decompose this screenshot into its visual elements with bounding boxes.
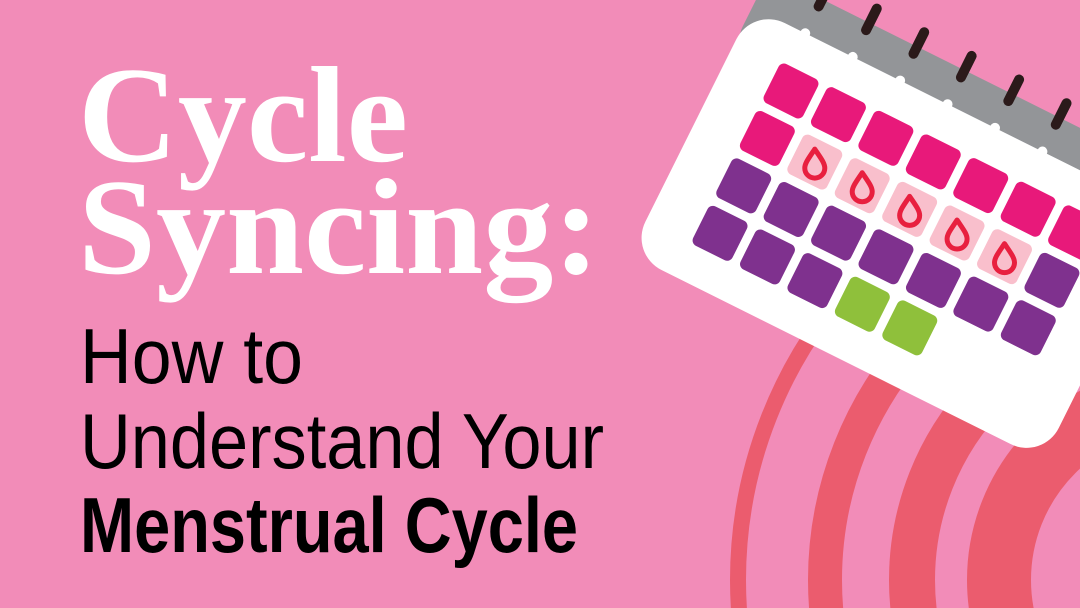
title: Cycle Syncing: Cycle [78,39,408,191]
calendar rings [819,0,1080,148]
subtitle: Understand Your [80,397,604,485]
subtitle: How to [80,312,303,400]
calendar header band [729,0,1080,260]
green tiles [833,275,939,357]
subtitle [80,312,604,569]
calendar body [629,7,1080,460]
title: Cycle Syncing [78,39,600,303]
subtitle: Menstrual Cycle [80,481,578,569]
pink tiles [738,61,1080,310]
period drop tiles [785,133,1034,286]
purple tiles [691,109,1080,405]
calendar [629,0,1080,460]
title: Cycle Syncing: Syncing: [78,151,600,303]
concentric rings [738,136,1080,608]
